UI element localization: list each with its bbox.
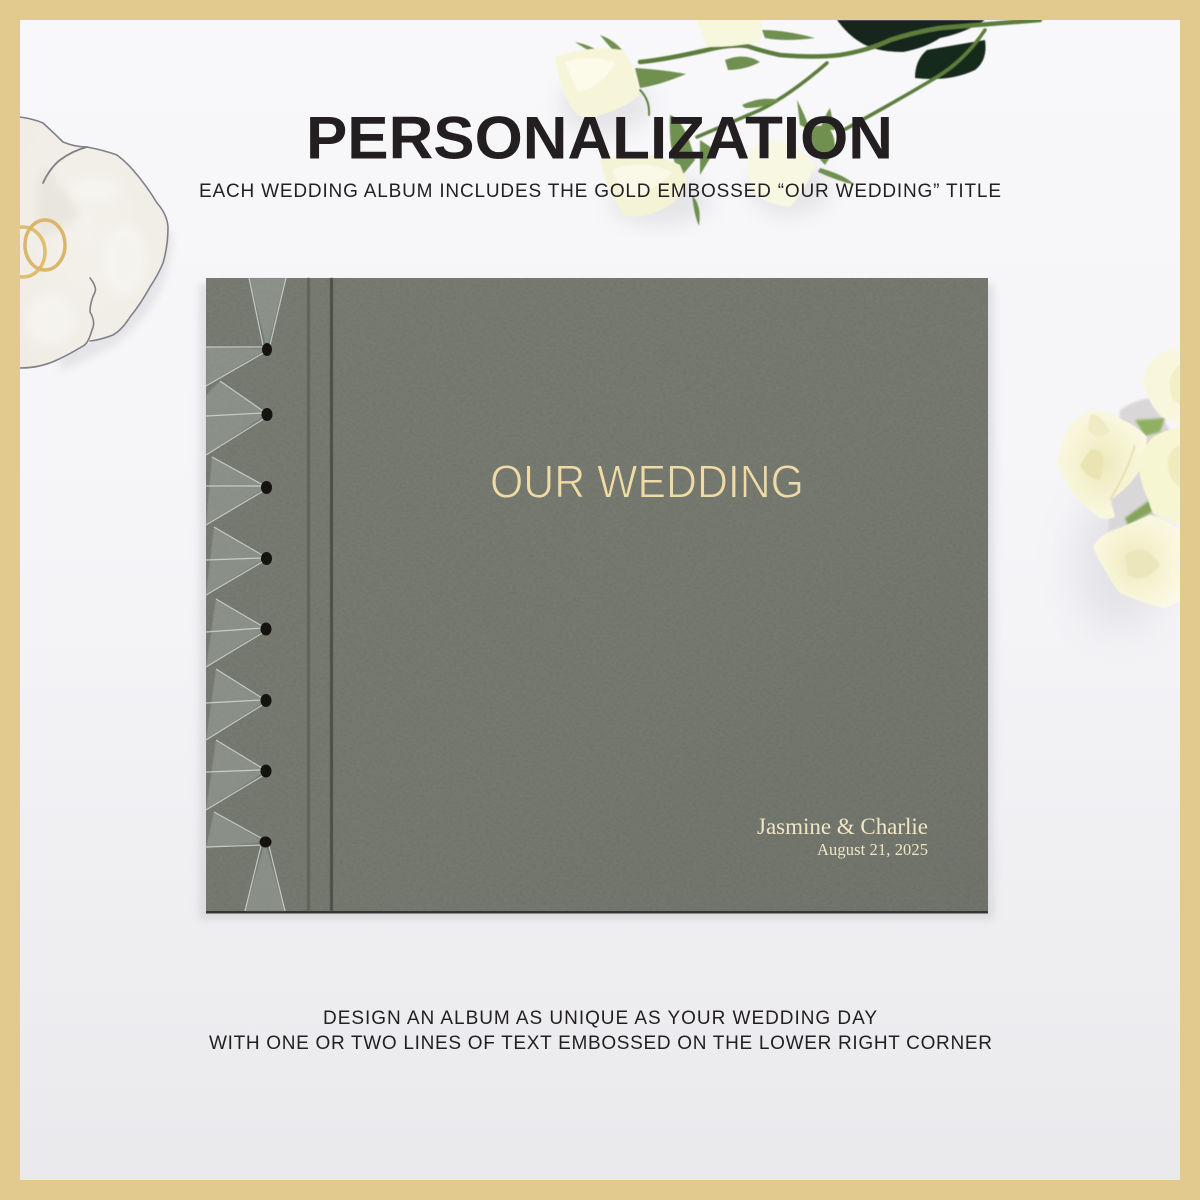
silver rim <box>20 117 168 368</box>
dark leaves <box>837 20 985 52</box>
rose bud lower right <box>748 140 815 207</box>
rose top <box>1143 349 1180 423</box>
rose left <box>1057 410 1147 519</box>
leather cover <box>206 278 988 913</box>
thread fans <box>206 278 286 911</box>
gold embossed title: OUR WEDDING <box>490 456 804 508</box>
binding threads <box>206 278 286 911</box>
rose bud lower left <box>600 154 687 217</box>
white roses with stems, top right <box>555 20 1040 226</box>
album shadow <box>199 284 994 920</box>
thread lines <box>206 278 286 911</box>
rose bottom <box>1093 515 1180 608</box>
punched holes <box>260 343 272 848</box>
bottom description: WITH ONE OR TWO LINES OF TEXT EMBOSSED ON THE LOWER RIGHT CORNER <box>209 1033 992 1054</box>
bottom description: DESIGN AN ALBUM AS UNIQUE AS YOUR WEDDING DAY <box>323 1008 877 1029</box>
main heading: PERSONALIZATION <box>306 104 893 172</box>
sepals and small leaves <box>575 30 855 226</box>
embossed date: August 21, 2025 <box>817 840 928 859</box>
bottom description <box>209 1008 992 1054</box>
album cover <box>199 278 994 920</box>
rose middle <box>1138 427 1180 523</box>
stems <box>640 20 1040 137</box>
subheading: EACH WEDDING ALBUM INCLUDES THE GOLD EMBOSSED “OUR WEDDING” TITLE <box>199 181 1001 202</box>
dish highlights <box>25 178 147 345</box>
embossed names: Jasmine & Charlie <box>757 814 928 839</box>
ceramic ring dish with gold rings <box>1 117 172 372</box>
flower shadows <box>560 75 830 225</box>
gold rings <box>1 220 65 277</box>
dish silhouette <box>20 117 168 368</box>
rose bud top <box>697 20 763 47</box>
rose bud upper left <box>555 49 639 119</box>
white roses cluster, right edge <box>1057 349 1180 630</box>
